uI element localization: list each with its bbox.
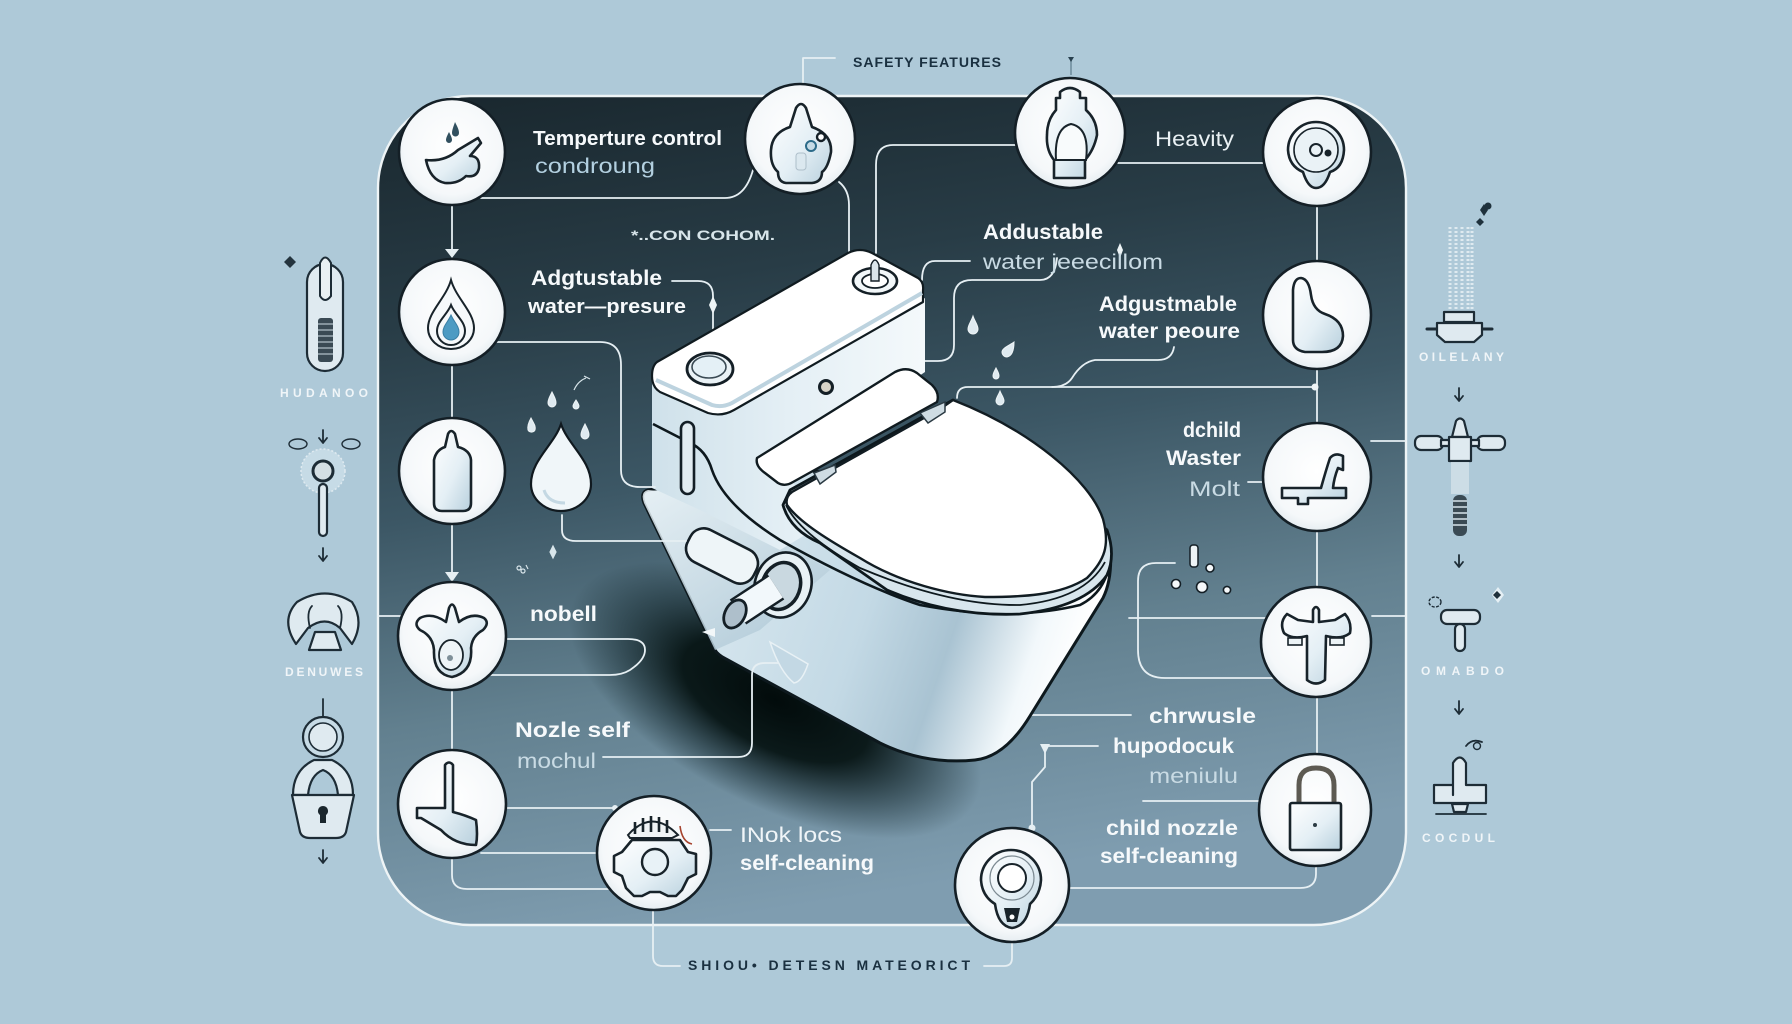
side label: oilelany: OILELANY — [1419, 350, 1504, 364]
label: adjustable water pressure right: water peoure — [1098, 320, 1240, 343]
label: inok locs self-cleaning — [740, 824, 874, 875]
label: chrwusle hupodocuk meniulu: hupodocuk — [1113, 735, 1234, 758]
label: child nozzle self-cleaning: child nozzle — [1106, 817, 1238, 840]
label: adjustable water centre: Addustable — [983, 221, 1103, 244]
label: chrwusle hupodocuk meniulu: chrwusle — [1149, 705, 1256, 728]
label: nobell: nobell — [530, 603, 597, 626]
bottom caption: SHIOU• DETESN MATEORICT — [688, 957, 971, 973]
side icon: water stream — [1427, 202, 1492, 342]
side icon: arc dome — [288, 594, 358, 650]
circle icon: temperature bowl — [399, 99, 505, 205]
label: inok locs self-cleaning: self-cleaning — [740, 852, 874, 875]
circle icon: padlock — [1259, 754, 1371, 866]
circle icon: nozzle — [398, 750, 506, 858]
side icon: handheld pill — [284, 256, 343, 371]
side label: denuwes: DENUWES — [285, 665, 363, 679]
circle icon: nobell fitting — [398, 582, 506, 690]
label: child water molt: Molt — [1189, 478, 1240, 501]
circle icon: safety head — [745, 84, 855, 194]
label: nozzle self module: Nozle self — [515, 719, 631, 742]
label: adjustable water pressure right: Adgustmable — [1099, 293, 1237, 316]
small tag — [770, 642, 808, 683]
circle icon: bottle — [399, 418, 505, 524]
small triangle mark — [702, 628, 715, 637]
circle icon: spray fitting — [1261, 587, 1371, 697]
toilet tank lid — [652, 250, 923, 414]
circle icon: round dial — [1263, 98, 1371, 206]
big water drop — [531, 424, 591, 511]
circle icon: valve top — [1015, 78, 1125, 188]
label: adjustable water pressure right — [1098, 293, 1240, 343]
water drops — [528, 316, 1014, 439]
flush button — [687, 353, 733, 385]
label: chrwusle hupodocuk meniulu — [1113, 705, 1256, 788]
label: child water molt: Waster — [1166, 447, 1241, 470]
label: temperature control: condroung — [535, 155, 655, 178]
side icon: t-valve with spring — [1415, 388, 1505, 567]
side pill button — [681, 523, 763, 589]
toilet hinge bar — [757, 369, 938, 485]
circle icon: gear — [597, 796, 711, 910]
connector lines — [378, 57, 1405, 966]
toilet tank body — [652, 298, 925, 550]
label: inok locs self-cleaning: INok locs — [740, 824, 842, 847]
toilet illustration — [643, 250, 1112, 761]
circle icon: curved handle — [1263, 261, 1371, 369]
label: nozzle self module — [515, 719, 631, 773]
connector lines over toilet — [496, 342, 778, 757]
label: adjustable water pressure left: Adgtustable — [531, 267, 662, 290]
side label: omabdo: OMABDO — [1421, 664, 1504, 678]
label: nozzle self module: mochul — [517, 750, 596, 773]
label: child nozzle self-cleaning: self-cleaning — [1100, 845, 1238, 868]
side label: cocdul: COCDUL — [1422, 831, 1495, 845]
label: temperature control — [533, 128, 722, 178]
toilet back plate — [643, 490, 830, 650]
label: child water molt — [1166, 419, 1241, 501]
toilet seat rim — [783, 400, 1112, 614]
label: adjustable water centre: water jeeecillom — [982, 251, 1163, 274]
label: con cohom: *..CON COHOM. — [631, 227, 775, 243]
side icon: padlock — [292, 699, 354, 863]
side icon: probe — [289, 430, 360, 561]
tank knob — [853, 260, 897, 294]
circle icon: faucet — [1263, 423, 1371, 531]
toilet bowl body — [643, 470, 1111, 761]
toilet seat cover — [787, 400, 1106, 597]
circle icon: remote — [955, 828, 1069, 942]
small sparkles left — [517, 376, 590, 573]
label: temperature control: Temperture control — [533, 128, 722, 150]
label: heavity: Heavity — [1155, 128, 1235, 151]
tank side slot — [681, 422, 694, 494]
label: child water molt: dchild — [1183, 419, 1241, 442]
label: adjustable water pressure left — [527, 267, 686, 318]
label: adjustable water pressure left: water—presure — [527, 296, 686, 318]
dots and pill — [1172, 545, 1231, 594]
label: chrwusle hupodocuk meniulu: meniulu — [1149, 765, 1238, 788]
title: safety features: SAFETY FEATURES — [853, 54, 1002, 70]
side icon: t-handle — [1429, 587, 1504, 651]
label: child nozzle self-cleaning — [1100, 817, 1238, 868]
label: adjustable water centre — [982, 221, 1163, 274]
panel: dark rounded card — [378, 96, 1406, 925]
side label: hudanoo: HUDANOO — [280, 386, 368, 400]
side icon: stand fixture — [1434, 701, 1486, 814]
circle icon: water drop — [399, 259, 505, 365]
tank hole — [820, 380, 832, 394]
water pipe — [719, 544, 821, 632]
